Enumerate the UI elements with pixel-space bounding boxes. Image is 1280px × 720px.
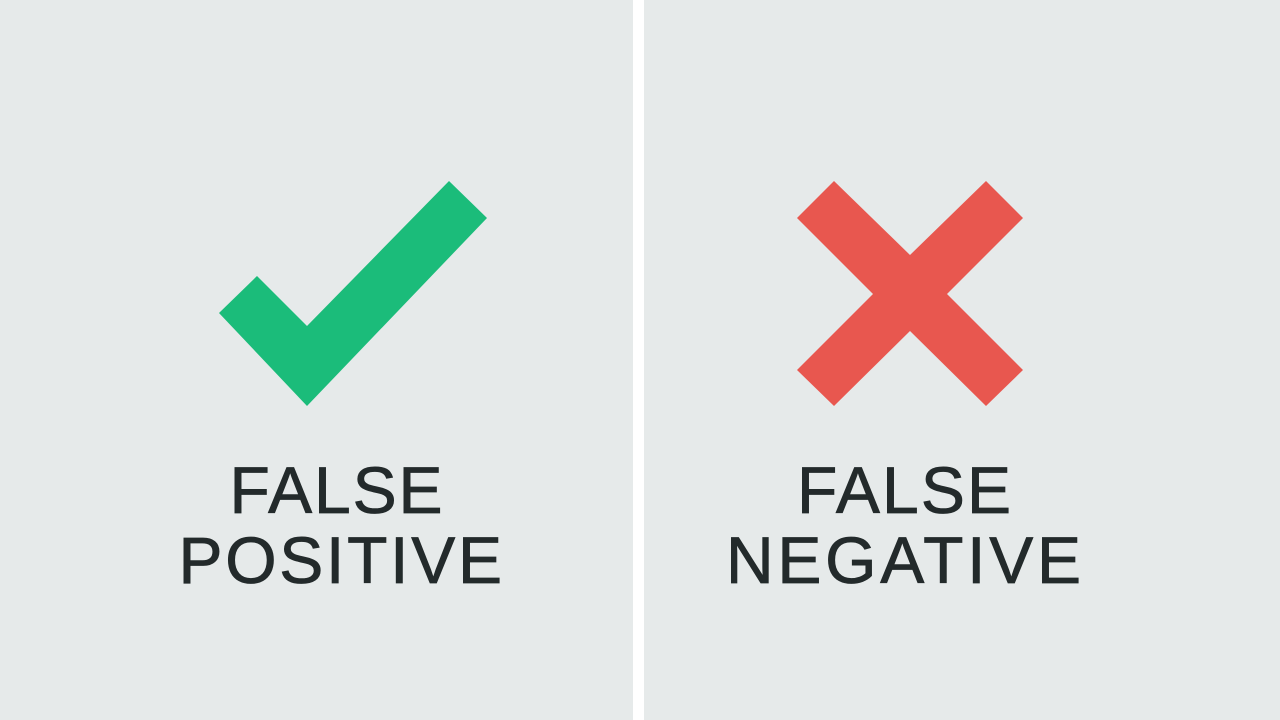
icon: red cross (797, 181, 1023, 406)
icon: green check mark (219, 181, 487, 406)
heading: false positive: POSITIVE (178, 523, 502, 597)
heading: false negative: NEGATIVE (726, 523, 1081, 597)
panel: false positive (0, 0, 633, 720)
heading: false negative: FALSE (797, 453, 1011, 527)
heading: false negative (726, 453, 1081, 597)
panel: false negative (644, 0, 1280, 720)
heading: false positive: FALSE (230, 453, 442, 527)
heading: false positive (178, 453, 502, 597)
